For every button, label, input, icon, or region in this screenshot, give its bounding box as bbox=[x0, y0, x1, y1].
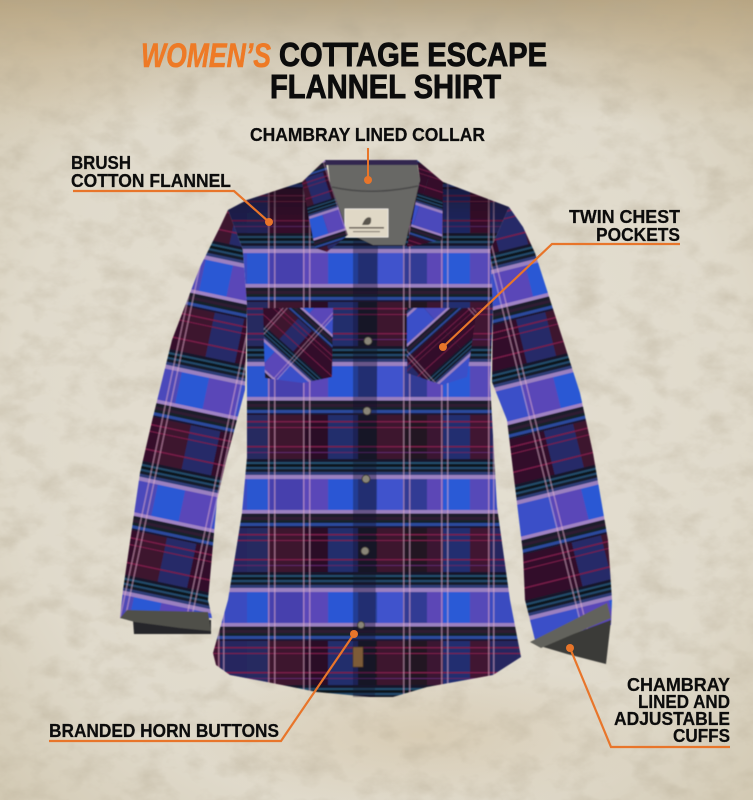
right chest pocket bbox=[407, 308, 477, 385]
callout: brush cotton flannel: COTTON FLANNEL bbox=[71, 170, 231, 191]
right collar bbox=[407, 160, 443, 247]
callout: twin chest pockets: TWIN CHEST bbox=[569, 206, 681, 227]
title bbox=[141, 37, 547, 106]
right sleeve bbox=[490, 207, 612, 640]
callout: chambray lined and adjustable cuffs: CUFFS bbox=[673, 725, 730, 746]
buttons bbox=[358, 337, 372, 628]
title line 2: FLANNEL SHIRT bbox=[270, 69, 501, 106]
left chest pocket bbox=[263, 308, 333, 383]
callout: twin chest pockets: POCKETS bbox=[596, 224, 680, 245]
callout: branded horn buttons: BRANDED HORN BUTTONS bbox=[49, 720, 279, 741]
collar seam bbox=[332, 186, 418, 191]
callout: twin chest pockets bbox=[439, 206, 681, 351]
callout: chambray lined and adjustable cuffs: CHAMBRAY bbox=[627, 674, 731, 695]
callout: chambray lined and adjustable cuffs: LINED AND bbox=[638, 691, 730, 712]
hem leather tag bbox=[353, 647, 363, 667]
flannel shirt illustration bbox=[120, 160, 612, 697]
left collar bbox=[302, 160, 348, 252]
callout: chambray lined collar: CHAMBRAY LINED COLLAR bbox=[250, 124, 485, 145]
left sleeve bbox=[120, 210, 247, 618]
neck label bbox=[345, 209, 388, 237]
callout: brush cotton flannel bbox=[71, 152, 273, 226]
right cuff bbox=[530, 603, 611, 664]
title line 1: COTTAGE ESCAPE bbox=[279, 37, 547, 74]
callout: chambray lined and adjustable cuffs bbox=[566, 644, 731, 747]
callout: chambray lined collar bbox=[250, 124, 485, 184]
collar top band bbox=[325, 160, 418, 165]
shirt body bbox=[213, 182, 521, 697]
collar lining bbox=[328, 163, 420, 245]
callout: chambray lined and adjustable cuffs: ADJUSTABLE bbox=[614, 708, 730, 729]
title accent: women's: WOMEN’S bbox=[141, 37, 271, 75]
left cuff bbox=[120, 610, 211, 634]
button placket bbox=[353, 240, 378, 697]
callout: branded horn buttons bbox=[49, 630, 358, 741]
callout: brush cotton flannel: BRUSH bbox=[71, 152, 131, 173]
dark yoke shading bbox=[228, 182, 509, 250]
